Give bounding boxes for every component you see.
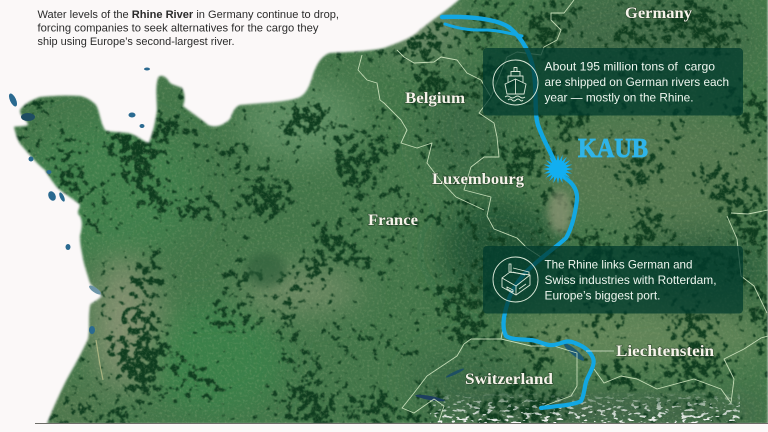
icon: factory (493, 257, 538, 302)
industry text: Swiss industries with Rotterdam, (544, 273, 716, 287)
industry text: The Rhine links German and (544, 258, 692, 272)
label: Liechtenstein with leader line: Liechtenstein (616, 343, 714, 360)
icon: ship (493, 60, 538, 105)
cargo text: About 195 million tons of cargo (544, 60, 715, 74)
panel: cargo fact (483, 48, 743, 116)
label: Luxembourg: Luxembourg (432, 171, 524, 188)
industry text: Europe’s biggest port. (544, 288, 660, 302)
coastal water and islands (7, 68, 586, 403)
panel: industry fact (483, 246, 743, 314)
label: KAUB: KAUB (578, 133, 648, 163)
label: Switzerland: Switzerland (465, 371, 553, 388)
intro text: ship using Europe’s second-largest river. (38, 36, 234, 48)
Rhine River (442, 17, 594, 408)
cargo text: are shipped on German rivers each (544, 75, 729, 89)
icon: Kaub location burst (543, 154, 573, 184)
baseline rule (35, 423, 768, 424)
cargo text: year — mostly on the Rhine. (544, 90, 694, 104)
label: France: France (368, 212, 418, 229)
label: Germany: Germany (625, 5, 692, 22)
label: Belgium: Belgium (405, 90, 466, 107)
intro text: forcing companies to seek alternatives for the cargo they (38, 22, 319, 34)
intro text: Water levels of the Rhine River in Germany continue to drop, (38, 9, 338, 21)
national borders (358, 0, 768, 421)
